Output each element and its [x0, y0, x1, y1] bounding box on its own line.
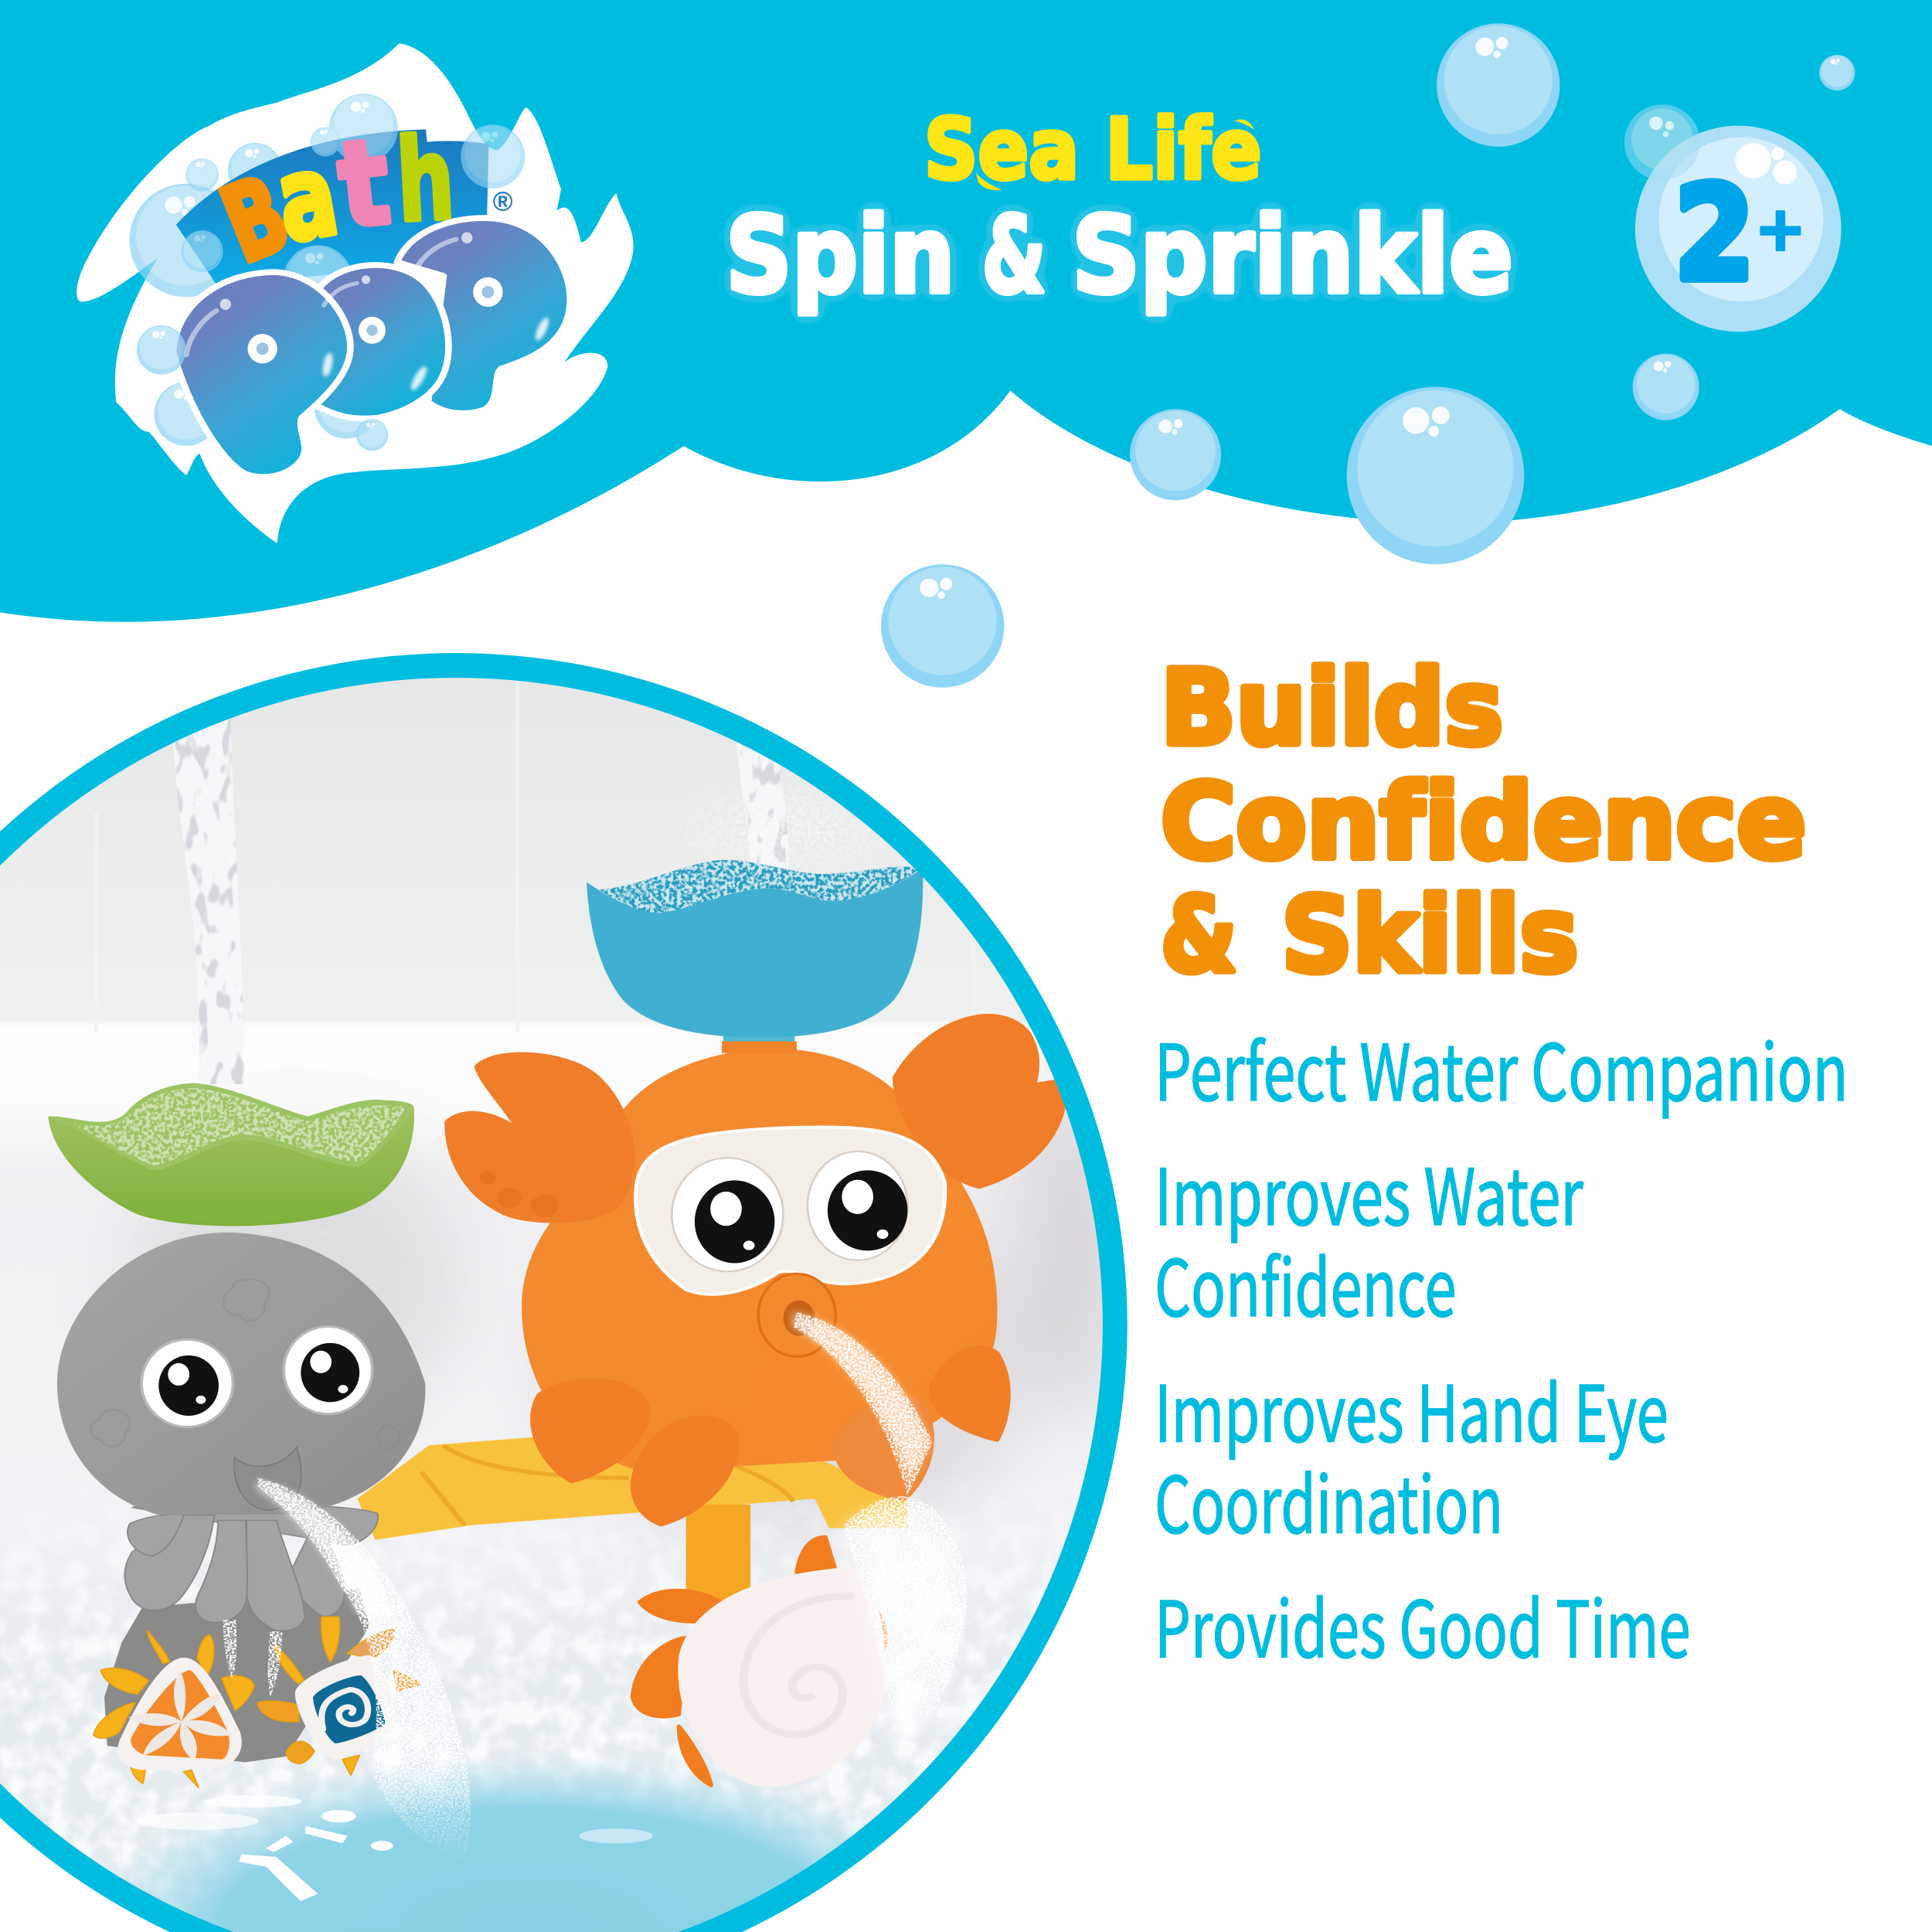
triangle pinwheel blades — [94, 1631, 254, 1787]
logo word: Bath: a — [267, 128, 346, 268]
water sprays — [223, 1312, 967, 1862]
benefit: Improves Hand Eye Coordination: Coordination — [1155, 1442, 1503, 1555]
benefit: Improves Hand Eye Coordination — [1155, 1351, 1668, 1555]
tub shading — [135, 1072, 1128, 1553]
jellyfish eyes — [141, 1326, 372, 1427]
logo P gloss arcs — [186, 240, 456, 355]
logo bubble behind the letters P — [284, 245, 352, 315]
logo back bubbles — [129, 143, 477, 446]
shell water wheel blades — [632, 1537, 886, 1785]
translucent bubble over badge — [1624, 104, 1700, 180]
age badge: 2+: 2 — [1675, 159, 1754, 309]
toys — [57, 1018, 1062, 1862]
crab eyes — [672, 1151, 907, 1271]
logo word: Bath: t — [332, 113, 396, 254]
bowl water sparkle — [599, 860, 919, 913]
logo banner bubbles — [181, 94, 525, 272]
header wave panel — [0, 0, 1932, 622]
logo word: Bath: h — [393, 113, 457, 247]
bowl body — [587, 867, 923, 1037]
yellow pipe — [357, 1437, 907, 1605]
crab body — [522, 1049, 998, 1472]
benefit: Improves Water Confidence: Improves Water — [1155, 1134, 1584, 1247]
green bowl inside — [48, 1083, 414, 1171]
triangle pinwheel — [117, 1658, 242, 1770]
crab left claw — [451, 1057, 629, 1218]
jellyfish embossed flowers — [90, 1280, 400, 1451]
green bowl sparkle — [74, 1088, 406, 1165]
jellyfish back plate — [104, 1588, 369, 1762]
crab goggles — [635, 1127, 945, 1294]
crab right claw — [897, 1018, 1062, 1185]
logo: Bath Pop — [77, 43, 634, 543]
photo background — [0, 665, 1134, 1932]
photo ring — [0, 653, 1128, 1932]
jellyfish body — [57, 1233, 425, 1515]
heading: Builds Confidence & Skills: Builds — [1161, 648, 1503, 768]
age badge: 2+ — [1635, 126, 1841, 332]
water streams from tap — [173, 719, 818, 1084]
bowl inside with water — [599, 860, 919, 913]
logo P holes and highlights — [220, 233, 551, 392]
logo word: Bath — [206, 113, 457, 287]
product line title: Sea Life: Sea Life — [924, 100, 1262, 199]
logo word: Bath: B — [206, 152, 304, 287]
product title: Spin & Sprinkle — [726, 195, 1513, 318]
square spiral wheel — [295, 1655, 397, 1760]
heading: Builds Confidence & Skills — [1161, 648, 1806, 995]
benefit: Improves Water Confidence: Confidence — [1155, 1226, 1457, 1338]
bubble between header and photo — [881, 564, 1004, 688]
benefit: Improves Water Confidence — [1155, 1134, 1584, 1338]
logo blue banner — [176, 129, 489, 286]
crab mouth — [758, 1274, 835, 1356]
heading: Builds Confidence & Skills: Skills — [1281, 875, 1578, 995]
benefit: Provides Good Time: Provides Good Time — [1155, 1566, 1691, 1679]
benefit: Improves Hand Eye Coordination: Improves Hand Eye — [1155, 1351, 1668, 1464]
bowl stem — [723, 1032, 794, 1047]
registered mark: ® — [493, 187, 513, 217]
product title: Spin & Sprinkle: Sprinkle — [1072, 195, 1513, 318]
blue bowl — [587, 860, 923, 1047]
square spiral blades — [257, 1617, 422, 1775]
jellyfish tentacles — [124, 1504, 378, 1631]
green bowl body — [48, 1107, 414, 1226]
green bowl — [48, 1083, 414, 1226]
foam and bath water — [0, 1504, 1034, 1932]
bubbles in header — [1130, 23, 1855, 564]
jellyfish mouth — [234, 1447, 301, 1510]
benefits list — [1155, 1010, 1849, 1679]
logo front bubbles — [137, 325, 388, 451]
logo splash — [77, 43, 634, 543]
crab stem collar — [722, 1042, 797, 1053]
product title: Spin & Sprinkle: & — [982, 195, 1046, 318]
age badge: 2+: + — [1754, 193, 1806, 265]
crab legs — [533, 1348, 1008, 1524]
shell water wheel — [678, 1566, 886, 1787]
heading: Builds Confidence & Skills: & — [1161, 875, 1237, 995]
heading: Builds Confidence & Skills: Confidence — [1161, 762, 1806, 883]
logo letters P — [173, 218, 570, 477]
photo circle with toys — [0, 653, 1134, 1932]
product title: Spin & Sprinkle: Spin — [726, 195, 955, 318]
